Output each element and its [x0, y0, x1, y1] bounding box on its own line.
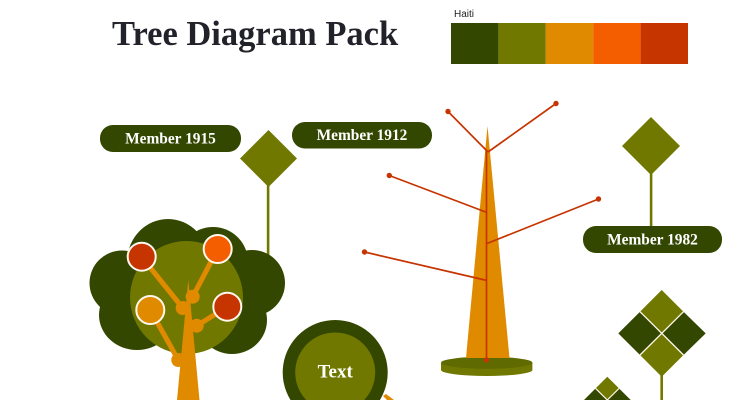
trunk	[177, 280, 200, 400]
label: Member 1982	[583, 226, 722, 253]
crown inner circle	[130, 241, 243, 354]
branches	[142, 249, 227, 360]
diamond marker: upper right	[622, 117, 680, 227]
quad diamond: small lower	[584, 377, 631, 400]
title: Tree Diagram Pack	[112, 15, 399, 53]
tree: leafy with fruit	[90, 219, 285, 400]
fruit	[128, 235, 241, 324]
text circle: Text	[318, 362, 353, 382]
tree: bare with red branches	[362, 101, 601, 376]
orange stem below text circle	[383, 394, 394, 400]
branch knobs	[171, 290, 204, 367]
tree crown	[90, 219, 285, 354]
red branches	[364, 104, 598, 360]
quad diamond: right	[618, 290, 706, 400]
branch tips	[362, 101, 601, 363]
label: Member 1912	[292, 122, 432, 148]
palette: Haiti	[451, 9, 688, 64]
text circle	[283, 320, 388, 400]
trunk	[466, 126, 510, 358]
label: Member 1982: Member 1982	[607, 232, 698, 248]
palette: Haiti: Haiti	[454, 9, 474, 20]
label: Member 1915: Member 1915	[125, 130, 216, 148]
label: Member 1915	[100, 125, 241, 152]
disc base	[441, 357, 532, 376]
diamond marker: upper left	[240, 130, 297, 258]
label: Member 1912: Member 1912	[317, 127, 408, 144]
